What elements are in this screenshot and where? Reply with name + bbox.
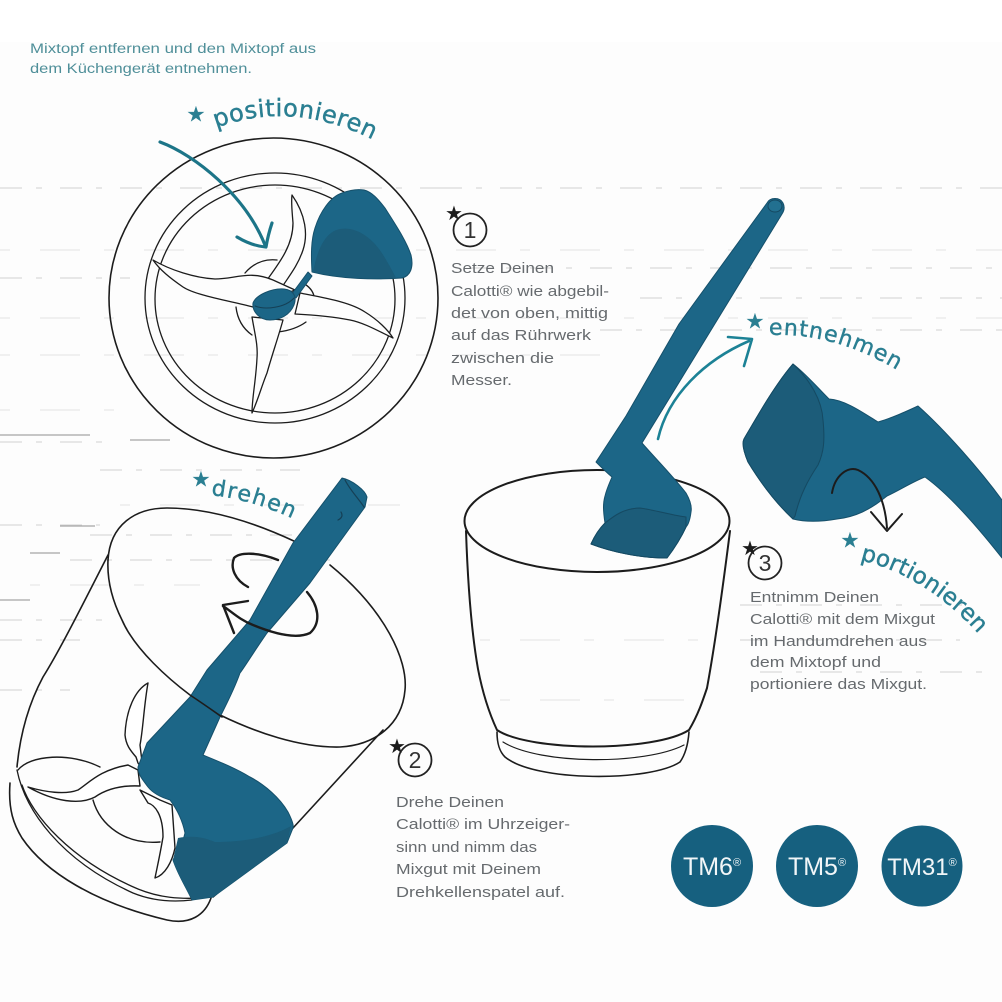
step 3 number bbox=[741, 536, 782, 580]
arrow into bowl bbox=[160, 142, 272, 247]
badge: TM6 bbox=[671, 825, 753, 907]
step 3 text: dem Mixtopf und bbox=[750, 655, 881, 671]
label: portionieren: ★ bbox=[841, 528, 859, 552]
bowl rim front line bbox=[108, 560, 222, 717]
badge: TM31 bbox=[882, 826, 962, 906]
mixing knife bbox=[153, 195, 393, 413]
intro text: dem Küchengerät entnehmen. bbox=[30, 61, 252, 76]
badge: TM6: TM6 bbox=[683, 853, 733, 881]
step 1 number: 1 bbox=[464, 217, 476, 243]
label: drehen: drehen bbox=[212, 480, 294, 518]
step 2 text bbox=[396, 795, 570, 901]
step 1 text: Setze Deinen bbox=[451, 261, 554, 277]
step 3 text: Entnimm Deinen bbox=[750, 590, 879, 606]
badge: TM5: TM5 bbox=[788, 853, 838, 881]
step 3 text bbox=[750, 590, 935, 693]
bowl rings bbox=[109, 138, 438, 458]
step 3 text: portioniere das Mixgut. bbox=[750, 677, 927, 693]
step 2 number: ★ bbox=[388, 734, 406, 758]
label: entnehmen: entnehmen bbox=[770, 320, 900, 370]
illustration 3: upright bowl with spatula bbox=[464, 198, 784, 776]
step 1 text: det von oben, mittig bbox=[451, 306, 608, 322]
step 2 text: sinn und nimm das bbox=[396, 840, 537, 856]
label: drehen: ★ bbox=[192, 467, 210, 491]
spatula bbox=[138, 478, 367, 900]
label: entnehmen: ★ bbox=[746, 309, 764, 333]
handle cap bbox=[768, 200, 782, 212]
step 2 text: Drehkellenspatel auf. bbox=[396, 885, 565, 901]
knife blades bbox=[18, 683, 175, 878]
spoon head bbox=[311, 190, 412, 279]
spatula lifted from bowl bbox=[591, 198, 784, 558]
step 1 text bbox=[451, 261, 609, 389]
step 1 number bbox=[445, 201, 486, 246]
step 2 number bbox=[388, 734, 432, 776]
arrow: lifting out bbox=[658, 337, 752, 439]
step 3 number: 3 bbox=[759, 550, 771, 576]
step 1 text: Calotti® wie abgebil- bbox=[451, 284, 609, 300]
badge: TM6: ® bbox=[733, 857, 741, 869]
badge: TM31: TM31 bbox=[887, 854, 949, 881]
spoon darker centre bbox=[313, 229, 396, 278]
intro text: Mixtopf entfernen und den Mixtopf aus bbox=[30, 41, 316, 56]
illustration: spatula head portioning bbox=[743, 364, 1002, 558]
label: portionieren: portionieren bbox=[860, 548, 985, 633]
step 2 text: Mixgut mit Deinem bbox=[396, 862, 541, 878]
badge: TM5: ® bbox=[838, 857, 846, 869]
spatula darker tip bbox=[173, 826, 291, 900]
illustration 2: tilted bowl with spatula bbox=[10, 478, 405, 921]
step 3 text: im Handumdrehen aus bbox=[750, 634, 927, 650]
step 2 number: 2 bbox=[409, 747, 421, 773]
label: entnehmen bbox=[746, 309, 900, 370]
handle cap bbox=[338, 480, 364, 520]
bowl outline bbox=[10, 508, 405, 921]
step 3 number: ★ bbox=[741, 536, 759, 560]
label: drehen bbox=[192, 467, 294, 518]
step 1 number: ★ bbox=[445, 201, 463, 225]
bowl bbox=[464, 470, 730, 776]
arrow: portion bbox=[832, 469, 902, 531]
step 3 text: Calotti® mit dem Mixgut bbox=[750, 612, 935, 628]
step 1 text: auf das Rührwerk bbox=[451, 328, 592, 344]
spoon neck and bowl bbox=[253, 272, 312, 320]
badge: TM31: ® bbox=[949, 857, 957, 869]
step 2 text: Drehe Deinen bbox=[396, 795, 504, 811]
step 1 text: Messer. bbox=[451, 373, 512, 389]
intro text bbox=[30, 41, 316, 76]
scoop darker half bbox=[743, 364, 824, 519]
step 2 text: Calotti® im Uhrzeiger- bbox=[396, 817, 570, 833]
spatula darker tip bbox=[591, 508, 686, 558]
badge: TM5 bbox=[776, 825, 858, 907]
illustration 1: top view of mixing bowl bbox=[109, 138, 438, 458]
label: positionieren: positionieren bbox=[214, 98, 376, 139]
label: positionieren: ★ bbox=[187, 102, 205, 126]
step 1 text: zwischen die bbox=[451, 351, 554, 367]
rotation arrow bbox=[223, 554, 317, 636]
